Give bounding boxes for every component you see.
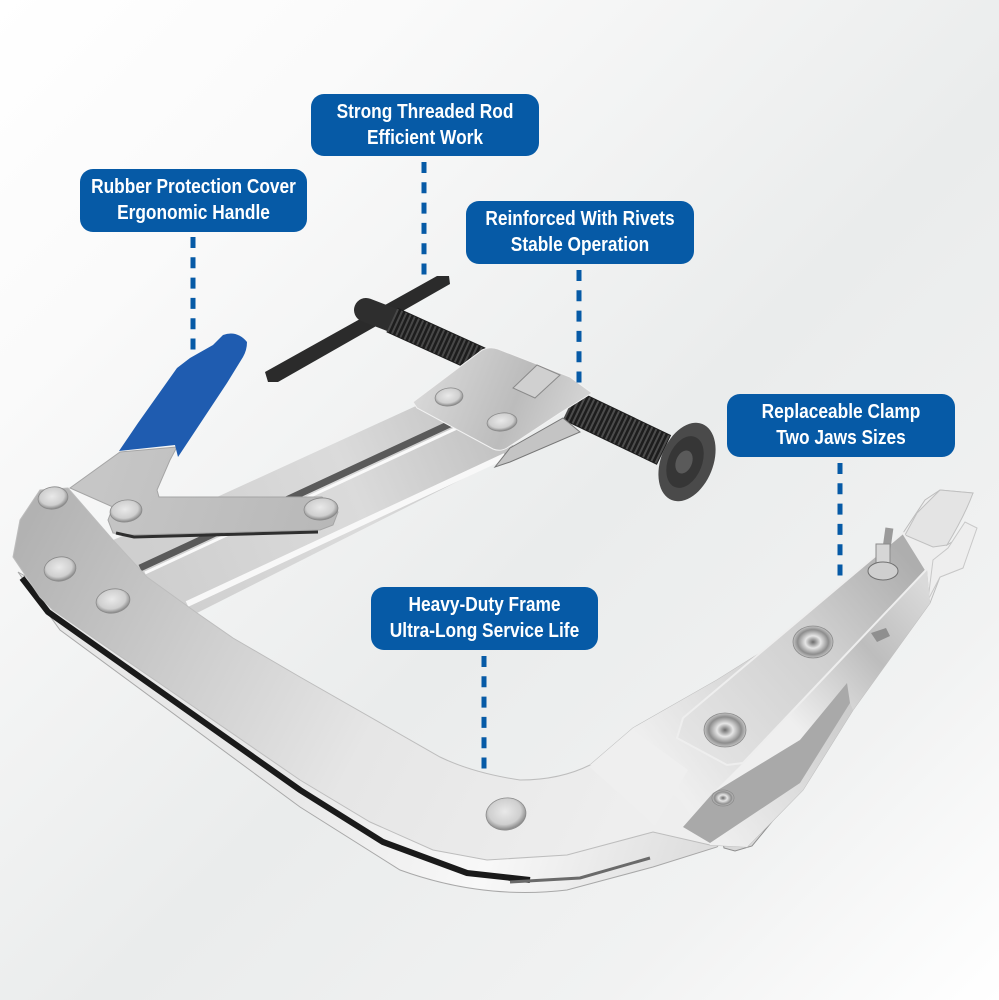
callout: threaded rod: Efficient Work <box>367 127 483 149</box>
threaded rod left <box>392 320 480 360</box>
dotted leaders <box>193 162 840 769</box>
spring clip <box>513 365 560 398</box>
grey facet <box>683 683 850 843</box>
callout: clamp: Two Jaws Sizes <box>776 427 906 449</box>
callout: rivets: Reinforced With Rivets <box>485 208 675 230</box>
callout: handle: Ergonomic Handle <box>117 202 270 224</box>
rod head <box>366 310 392 320</box>
callout: frame: Heavy-Duty Frame <box>409 594 560 616</box>
jaw tips <box>905 490 977 600</box>
callout: rivets <box>466 201 694 264</box>
callout: clamp: Replaceable Clamp <box>762 401 920 423</box>
pressed facet <box>590 730 688 826</box>
threaded rod right <box>570 405 664 450</box>
callout: handle <box>80 169 307 232</box>
link arm <box>70 447 338 535</box>
right arm shading <box>590 533 930 847</box>
callout: frame: Ultra-Long Service Life <box>390 620 579 642</box>
slider bracket <box>495 418 580 467</box>
clamp plate <box>677 533 926 765</box>
callout: handle: Rubber Protection Cover <box>91 176 296 198</box>
link edge <box>116 532 318 537</box>
slide bars <box>113 395 520 613</box>
back frame plate <box>18 572 740 892</box>
callout: rivets: Stable Operation <box>511 234 649 256</box>
T-bar handle <box>265 276 450 382</box>
underside panel <box>713 570 930 793</box>
rear hook <box>722 810 775 851</box>
callout: clamp <box>727 394 955 457</box>
main frame <box>13 488 975 860</box>
callout: threaded rod: Strong Threaded Rod <box>337 101 513 123</box>
slider plate <box>413 348 592 450</box>
rivets <box>36 386 833 833</box>
handle grip <box>119 334 247 457</box>
rod foot <box>648 414 726 510</box>
callout: threaded rod <box>311 94 539 156</box>
callout: frame <box>371 587 598 650</box>
bolt <box>868 528 898 642</box>
